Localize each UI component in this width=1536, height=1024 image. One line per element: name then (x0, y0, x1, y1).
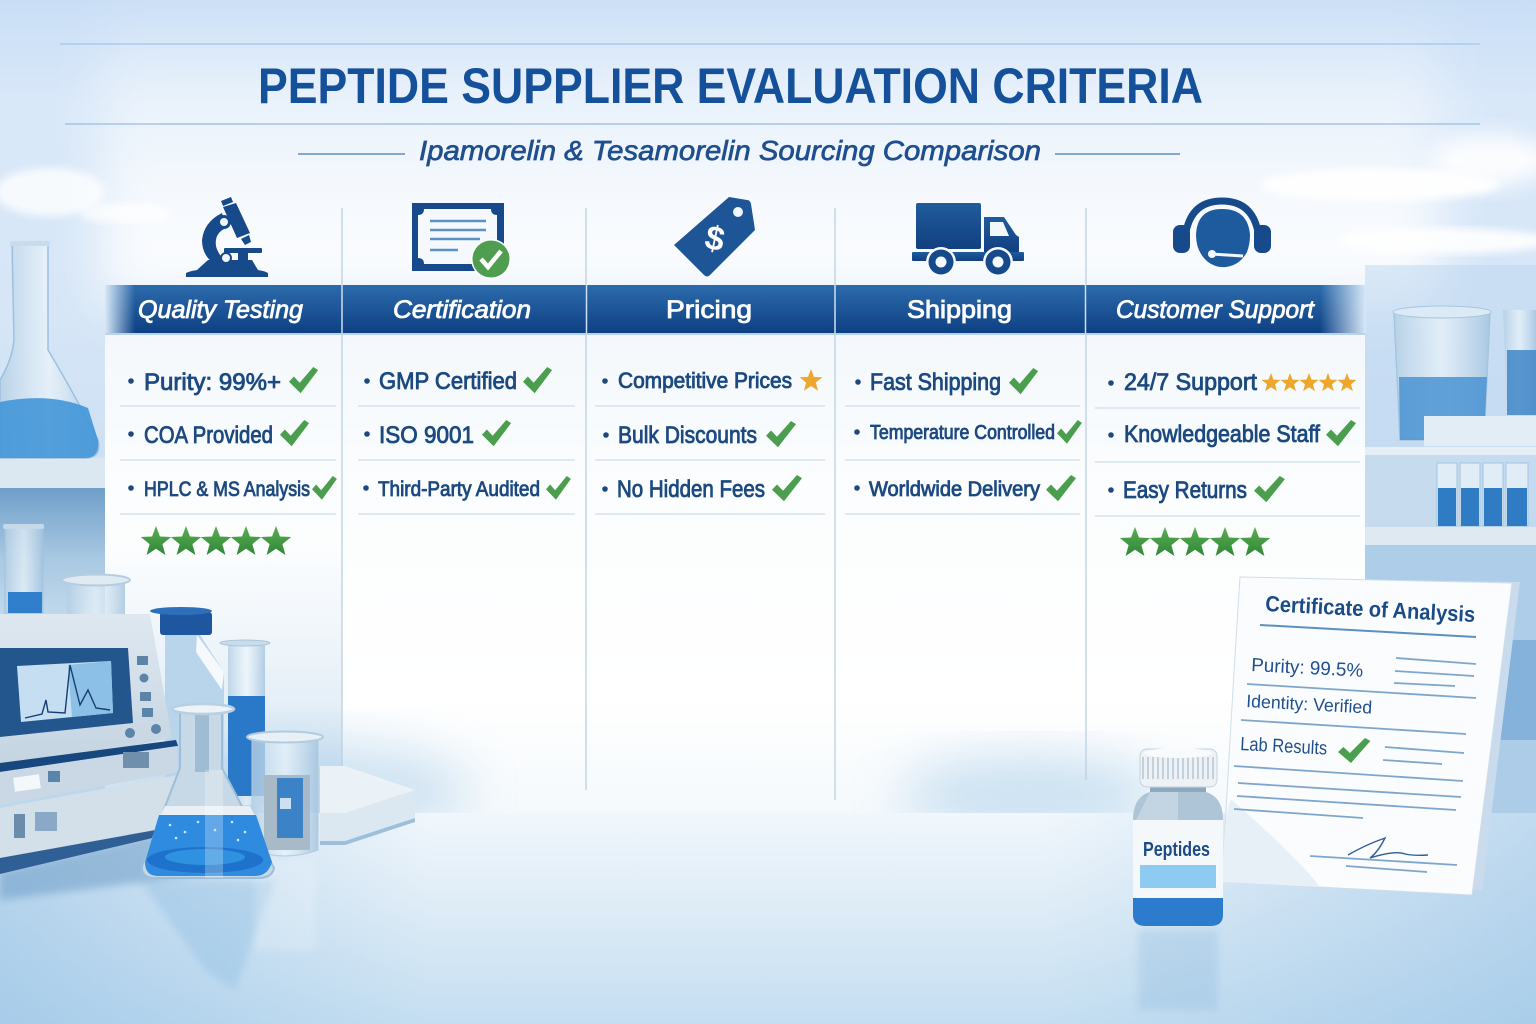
icon: gold star (800, 369, 822, 391)
peptides vial (1133, 748, 1223, 926)
column: customer support items: Knowledgeable Staff (1124, 421, 1320, 448)
column: shipping items: Worldwide Delivery (869, 478, 1040, 501)
erlenmeyer flask with blue liquid (142, 704, 274, 878)
floor shadow under instrument (0, 832, 240, 900)
test tube and beaker on instrument (3, 524, 130, 614)
column: certification items: Third-Party Audited (378, 478, 540, 501)
document field: purity: Purity: 99.5% (1251, 655, 1364, 682)
icon: customer support headset (1173, 201, 1271, 267)
signature (1348, 838, 1428, 858)
document field: lab results: Lab Results (1240, 734, 1328, 760)
document field: identity: Identity: Verified (1246, 691, 1373, 718)
icon: certificate (412, 203, 511, 279)
column: certification items (363, 367, 571, 501)
column: pricing items (602, 368, 822, 503)
rating: five gold stars (1261, 373, 1357, 391)
icon: price tag (674, 197, 755, 276)
column: customer support items (1108, 369, 1357, 556)
column heading: pricing: Pricing (666, 296, 752, 324)
column: quality testing items (128, 367, 337, 555)
icon: delivery truck (912, 203, 1024, 277)
right lab shelf background (1365, 306, 1536, 815)
column: quality testing items: Purity: 99%+ (144, 369, 281, 396)
glass reagent bottle (150, 607, 224, 780)
column: pricing items: Bulk Discounts (618, 422, 757, 449)
column heading: shipping: Shipping (907, 296, 1012, 324)
rating: five green stars (1120, 527, 1270, 556)
lab instrument with chromatogram (0, 614, 178, 874)
document heading: Certificate of Analysis (1265, 591, 1476, 627)
subtitle: Ipamorelin & Tesamorelin Sourcing Comparison (419, 135, 1041, 166)
column heading: quality testing: Quality Testing (138, 296, 303, 324)
header band (105, 285, 1366, 335)
column: pricing items: No Hidden Fees (617, 476, 765, 503)
icon: price tag: $ (702, 218, 728, 260)
column: quality testing items: HPLC & MS Analysis (144, 478, 310, 501)
column: shipping items (854, 368, 1082, 501)
accessory box (320, 766, 415, 845)
beaker with sample (247, 732, 323, 856)
column: quality testing items: COA Provided (144, 422, 273, 449)
panel: criteria table body (105, 208, 1365, 840)
column: shipping items: Fast Shipping (870, 369, 1001, 396)
floor (0, 813, 1536, 1024)
lab equipment group left (0, 524, 415, 900)
peptides vial: Peptides (1143, 839, 1210, 861)
icon: microscope (186, 197, 268, 277)
column: customer support items: 24/7 Support (1124, 369, 1257, 396)
column: certification items: ISO 9001 (379, 422, 474, 449)
rating: five green stars (141, 526, 291, 555)
column: pricing items: Competitive Prices (618, 368, 792, 393)
column heading: customer support: Customer Support (1116, 296, 1315, 324)
title rules (60, 44, 1480, 124)
column: shipping items: Temperature Controlled (870, 422, 1055, 444)
title: PEPTIDE SUPPLIER EVALUATION CRITERIA (258, 58, 1203, 114)
column: customer support items: Easy Returns (1123, 477, 1247, 504)
left lab shelf and flask background (0, 241, 105, 628)
graduated cylinder (220, 640, 270, 805)
column heading: certification: Certification (393, 296, 531, 324)
column: certification items: GMP Certified (379, 368, 517, 395)
certificate of analysis document (1222, 577, 1520, 895)
